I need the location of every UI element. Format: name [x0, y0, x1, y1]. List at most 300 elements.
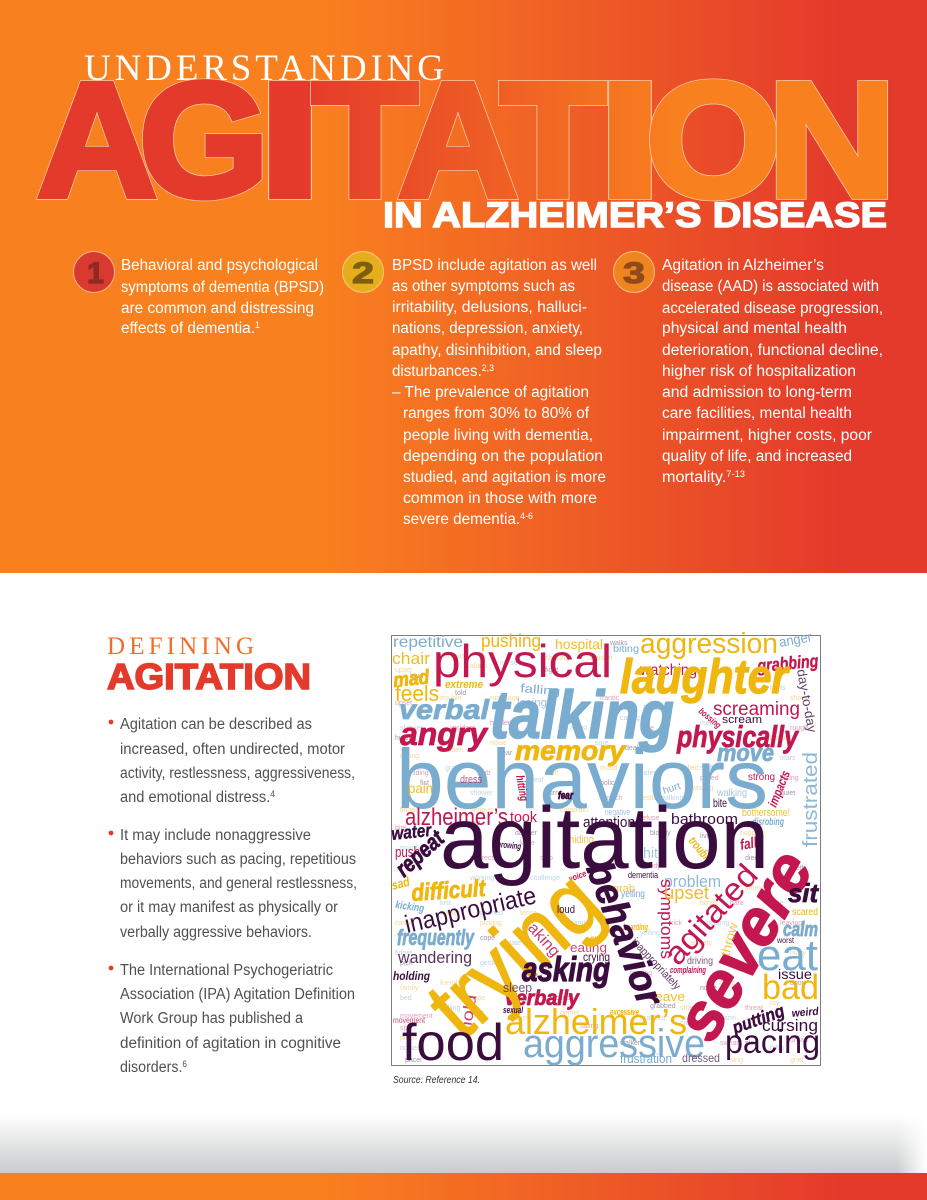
word cloud: dark purple words: repeat	[390, 824, 450, 882]
word cloud background: small words: nose	[450, 840, 465, 847]
word cloud: dark purple words: cursing	[762, 1016, 818, 1035]
word cloud: dark purple words: sit	[788, 878, 819, 908]
word cloud: crimson words: hitting	[513, 774, 531, 803]
word cloud background: small words: staff	[545, 770, 558, 777]
word cloud: crimson words: angry	[400, 716, 489, 752]
word cloud background: small words: upset	[395, 700, 412, 707]
word cloud background: small words: rude	[640, 725, 654, 732]
word cloud: blue words: hit	[643, 845, 659, 862]
word cloud background: small words: rage	[750, 960, 764, 967]
word cloud background: small words: dread	[790, 1037, 808, 1044]
text block: point 1: 1	[255, 320, 260, 330]
word cloud: dark purple words: fear	[558, 790, 574, 802]
word cloud: gold words: hospital	[555, 636, 603, 652]
text block: point 2: irritability, delusions, halluci-	[392, 299, 587, 316]
text block: bullet 1: 4	[270, 789, 275, 799]
word cloud: dark purple words: behavior	[578, 856, 671, 1013]
word cloud: gold words: bad	[762, 968, 819, 1007]
word cloud background: small words: fight	[545, 667, 558, 674]
text block: point 1: are common and distressing	[121, 300, 314, 317]
word cloud background: small words: hiding	[410, 770, 429, 777]
heading: defining agitation: AGITATION	[107, 656, 311, 697]
word cloud: gold words: alzheimer’s	[505, 1001, 687, 1042]
word cloud background: small words: lonely	[745, 885, 764, 892]
title: agitation: I	[598, 48, 662, 231]
word cloud: crimson words: agitated	[656, 857, 765, 972]
text block: point 2: 4-6	[520, 511, 533, 521]
title: agitation: A	[37, 48, 157, 231]
title: in alzheimer's disease: IN ALZHEIMER’S DISEASE	[383, 196, 887, 235]
word cloud background: small words: nervous	[440, 653, 465, 660]
word cloud: blue words: frustrated	[800, 752, 822, 847]
word cloud: dark purple words: issue	[778, 966, 812, 982]
word cloud background: small words: bored	[700, 900, 718, 907]
word cloud background: small words: calling	[620, 715, 640, 722]
word cloud background: small words: pulled	[700, 775, 719, 782]
word cloud: crimson words	[393, 635, 827, 1052]
word cloud background: small words: shower	[400, 725, 423, 732]
title: agitation: A	[398, 48, 518, 231]
text block: bullet 3: disorders.	[120, 1059, 188, 1076]
word cloud: blue words: frequently	[397, 925, 475, 950]
word cloud background: small words: night	[720, 980, 735, 987]
text block: point 3: deterioration, functional decline,	[662, 342, 883, 359]
word cloud background: small words: slap	[540, 855, 553, 862]
word cloud: dark purple words: sexual	[503, 1005, 523, 1015]
word cloud: dark purple words: worst	[776, 936, 795, 945]
word cloud: dark purple words: holding	[393, 969, 431, 983]
heading: defining agitation	[107, 633, 311, 697]
word cloud background: small words: threat	[745, 1005, 763, 1012]
word cloud background: small words: safety	[640, 770, 659, 777]
word cloud: crimson words: fall	[739, 834, 759, 854]
text block: point 3: care facilities, mental health	[662, 405, 852, 422]
word cloud: gold words: feels	[395, 681, 439, 706]
word cloud background: small words: twisting	[690, 785, 713, 792]
word cloud background: small words: agitate	[500, 940, 521, 947]
icon: number 3 badge: 3	[623, 257, 645, 290]
word cloud background: small words: quiet	[780, 790, 795, 797]
word cloud background: small words: nurse	[500, 660, 518, 667]
word cloud background: small words: strange	[680, 1005, 703, 1012]
word cloud background: small words: tone	[770, 900, 784, 907]
word cloud: gold words: hoarding	[623, 922, 648, 932]
word cloud background: small words: movement	[400, 1013, 433, 1020]
text block: bullet 2: verbally aggressive behaviors.	[120, 924, 312, 941]
word cloud background: small words: grabbed	[640, 1015, 666, 1022]
word cloud: blue words: repetitive	[393, 634, 463, 651]
text block: point 2: people living with dementia,	[403, 427, 593, 444]
text block: point 3	[662, 257, 883, 486]
word cloud: blue words: walking	[716, 788, 747, 799]
word cloud: blue words: frustration	[620, 1051, 672, 1066]
text block: bullet 3: definition of agitation in cognitive	[120, 1035, 341, 1052]
word cloud background: small words: caring	[395, 920, 414, 927]
word cloud background: small words: crazy	[680, 1020, 697, 1027]
word cloud: gold words: cut	[590, 934, 601, 945]
word cloud background: small words: grabs	[445, 765, 463, 772]
word cloud background: small words: tense	[520, 910, 537, 917]
word cloud: gold words: trouble	[686, 834, 716, 866]
word cloud background: small words: serious	[470, 807, 493, 814]
word cloud background: small words: bloody	[650, 830, 671, 837]
word cloud: dark purple words: bathroom	[671, 811, 738, 828]
word cloud: crimson words: push	[395, 844, 420, 861]
word cloud background: small words: sing	[730, 1057, 743, 1064]
word cloud background: small words: shower	[470, 790, 493, 797]
word cloud: blue words: problem	[664, 872, 721, 891]
title: agitation: T	[312, 48, 418, 231]
word cloud: dark purple words: driving	[687, 956, 713, 967]
word cloud background: small words: lived	[700, 833, 715, 840]
word cloud: gold words: pushing	[481, 631, 541, 651]
word cloud: dark purple words: crying	[583, 950, 610, 964]
icon: number 3 badge	[614, 252, 654, 292]
word cloud: blue words: move	[717, 740, 774, 767]
word cloud: crimson words: voice	[567, 868, 588, 884]
word cloud background: small words: resident	[450, 725, 475, 732]
word cloud background: small words: refuse	[640, 815, 660, 822]
word cloud: blue words: falling	[520, 681, 561, 698]
title: agitation: T	[312, 48, 418, 231]
text block: point 3: and admission to long-term	[662, 384, 852, 401]
word cloud background: small words: working	[469, 875, 494, 882]
text block: point 2: – The prevalence of agitation	[392, 384, 589, 401]
word cloud background: small words: leaving	[780, 920, 802, 927]
word cloud background: small words: finger	[400, 807, 418, 814]
word cloud: gold words: bothersome!	[742, 807, 790, 819]
word cloud: gold words: leave	[652, 989, 685, 1004]
word cloud: dark purple words: putting	[729, 1000, 787, 1038]
word cloud background: small words: yells	[470, 1010, 485, 1017]
title: agitation: T	[500, 48, 606, 231]
word cloud background: small words: walker	[619, 1040, 641, 1047]
word cloud: crimson words: bossing	[697, 706, 723, 730]
word cloud: dark purple words: dementia	[628, 870, 658, 880]
word cloud: gold words	[390, 628, 819, 1057]
word cloud background: small words: shaking	[545, 655, 569, 662]
word cloud background: small words: burn	[545, 790, 559, 797]
word cloud: crimson words: verbally	[505, 987, 580, 1010]
word cloud background: small words: tossing	[630, 970, 652, 977]
icon: number 2 badge: 2	[352, 257, 374, 290]
word cloud: gold words: excessive	[610, 1007, 639, 1017]
word cloud: blue words: eat	[757, 931, 818, 980]
word cloud: dark purple words: attention	[583, 814, 635, 831]
word cloud background: small words: kick	[670, 920, 683, 927]
text block: point 2: common in those with more	[403, 490, 597, 507]
word cloud: crimson words: dress	[460, 774, 482, 786]
word cloud background: small words: harm	[720, 1015, 736, 1022]
word cloud background: small words: shout	[790, 695, 807, 702]
panel: header background	[0, 0, 927, 573]
word cloud background: small words: spit	[400, 1025, 411, 1032]
word cloud background: small words: scared	[510, 1015, 531, 1022]
word cloud background: small words: mood	[600, 765, 618, 772]
word cloud background: small words: moody	[400, 845, 422, 852]
word cloud background: small words: stuff	[700, 765, 713, 772]
word cloud: crimson words: physical	[433, 635, 612, 687]
word cloud background: small words: picking	[480, 920, 502, 927]
word cloud: blue words: disrobing	[752, 817, 784, 828]
word cloud background: small words: picked	[550, 995, 570, 1002]
text block: point 3: disease (AAD) is associated with	[662, 278, 879, 295]
word cloud: gold words: hiding	[569, 834, 594, 846]
word cloud background: small words: drive	[620, 1010, 635, 1017]
word cloud background: small words: pulling	[440, 1005, 460, 1012]
word cloud: blue words: behaviors	[396, 732, 768, 826]
word cloud: dark purple words: sleep	[503, 980, 532, 995]
word cloud: dark purple words: wandering	[397, 948, 472, 967]
word cloud: dark purple words: pacing	[725, 1023, 820, 1060]
icon: number 2 badge	[342, 252, 384, 292]
title: agitation: A	[37, 48, 157, 231]
title: agitation: O	[646, 48, 781, 231]
word cloud background: small words: mean	[700, 720, 718, 727]
text block: bullet 2: It may include nonaggressive	[120, 827, 311, 844]
text block: bullet 3: Association (IPA) Agitation Definition	[120, 986, 355, 1003]
text block: point 2: nations, depression, anxiety,	[392, 320, 583, 337]
word cloud: gold words: grab	[613, 883, 635, 895]
word cloud background: small words: tears	[780, 755, 796, 762]
word cloud background: small words: stop	[745, 1040, 758, 1047]
text block: bullet 1: and emotional distress.	[120, 789, 279, 806]
word cloud background: small words: sore	[595, 740, 609, 747]
heading: defining agitation: DEFINING	[107, 633, 254, 660]
word cloud: dark purple words	[390, 668, 820, 1072]
text block: bullet 3	[109, 962, 355, 1076]
word cloud: blue words: yelling	[621, 889, 645, 900]
word cloud background: small words: upset	[395, 667, 412, 674]
word cloud background: small words: danger	[515, 830, 537, 837]
title: agitation: N	[768, 48, 896, 231]
word cloud: gold words: scared	[792, 907, 818, 918]
text block: bullet 1: activity, restlessness, aggressiveness,	[120, 765, 355, 782]
title: agitation: A	[398, 48, 518, 231]
text block: point 1	[121, 257, 324, 337]
word cloud: dark purple words: agitation	[440, 790, 769, 887]
text block: point 2: depending on the population	[403, 448, 603, 465]
text block: point 2: 2,3	[482, 363, 494, 373]
word cloud: crimson words: impacts	[765, 768, 793, 809]
text block: point 3: physical and mental health	[662, 320, 847, 337]
word cloud: blue words: talking	[490, 677, 674, 753]
word cloud background: small words: walks	[609, 640, 628, 647]
word cloud background: small words: frantic	[600, 695, 620, 702]
text block: point 1: effects of dementia.	[121, 320, 256, 337]
text block: point 3: mortality.	[662, 469, 724, 486]
caption: source: Source: Reference 14.	[393, 1075, 480, 1086]
word cloud background: small words: danger	[570, 920, 592, 927]
word cloud background: small words: walking	[659, 795, 683, 802]
word cloud: gold words: extreme	[445, 679, 483, 691]
word cloud: crimson words: alzheimer’s	[405, 804, 508, 831]
text block: bullet 1	[109, 716, 355, 806]
word cloud background: small words: rub	[480, 770, 490, 777]
text block: point 3: 7-13	[726, 469, 745, 479]
word cloud background: small words: redirect	[470, 855, 493, 862]
word cloud background: small words: complain	[560, 807, 588, 814]
text block: point 1: Behavioral and psychological	[121, 257, 318, 274]
word cloud background: small words: crying	[780, 775, 799, 782]
word cloud: dark purple words: dressed	[682, 1051, 720, 1065]
word cloud background: small words: walker	[439, 910, 461, 917]
text block: point 2: apathy, disinhibition, and sleep	[392, 342, 602, 359]
word cloud: blue words: calm	[783, 919, 818, 941]
word cloud background: small words: trouble	[440, 695, 462, 702]
word cloud background: small words	[395, 640, 808, 1064]
footer bar	[0, 1173, 927, 1200]
word cloud background: small words: talks	[770, 1045, 785, 1052]
word cloud background: small words: pulled	[680, 765, 699, 772]
word cloud background: small words: loud	[410, 673, 423, 680]
word cloud background: small words: pushed	[480, 910, 503, 917]
word cloud: gold words: trying	[408, 852, 620, 1057]
word cloud: gold words: laughter	[620, 651, 790, 704]
word cloud background: small words: brain	[465, 820, 481, 827]
word cloud background: small words: fist	[420, 780, 429, 787]
word cloud: gold words: throw	[717, 920, 741, 958]
word cloud background: small words: pacer	[405, 1057, 423, 1064]
word cloud background: small words: died	[745, 855, 758, 862]
word cloud background: small words: dealing	[625, 745, 648, 752]
word cloud background: small words: scratch	[600, 795, 623, 802]
word cloud: crimson words: severe	[660, 837, 827, 1052]
title: agitation: O	[646, 48, 781, 231]
word cloud: dark purple words: water	[390, 820, 433, 844]
text block: point 2: as other symptoms such as	[392, 278, 575, 295]
title: agitation: G	[139, 48, 269, 231]
word cloud: blue words: hurt	[662, 781, 682, 797]
text block: point 3: Agitation in Alzheimer’s	[662, 257, 824, 274]
chart: word cloud	[390, 628, 827, 1072]
word cloud background: small words: grabbed	[650, 1003, 676, 1010]
word cloud: gold words: aggression	[640, 628, 778, 660]
word cloud: crimson words: strong	[748, 772, 775, 783]
word cloud: blue words: negative	[605, 807, 630, 817]
title: agitation	[37, 48, 896, 231]
word cloud background: small words: harder	[490, 720, 511, 727]
word cloud background: small words: falling	[580, 1023, 598, 1030]
word cloud: crimson words: eating	[570, 940, 607, 955]
title: understanding: UNDERSTANDING	[84, 48, 444, 89]
word cloud: blue words: anger	[778, 628, 813, 650]
word cloud: crimson words: complaining	[670, 965, 706, 975]
word cloud background: small words: family	[400, 985, 419, 992]
word cloud background: small words: noise	[490, 740, 507, 747]
icon: number 1 badge: 1	[87, 257, 104, 290]
word cloud background: small words: cope	[470, 995, 485, 1002]
word cloud background: small words: swear	[720, 1040, 739, 1047]
word cloud: dark purple words: inappropriate	[402, 881, 539, 939]
word cloud: blue words: aggressive	[523, 1022, 705, 1066]
word cloud: dark purple words: day-to-day	[794, 668, 820, 734]
word cloud background: small words: alarm	[470, 663, 488, 670]
title: agitation: N	[768, 48, 896, 231]
title: agitation: G	[139, 48, 269, 231]
word cloud: dark purple words: inappropriately	[629, 936, 683, 993]
word cloud background: small words: wander	[589, 655, 614, 662]
word cloud background: small words: hurting	[395, 735, 417, 742]
text block: bullet 3: Work Group has published a	[120, 1010, 303, 1027]
text block: point 2: disturbances.	[392, 363, 484, 380]
word cloud background: small words: teeth	[790, 865, 806, 872]
text block: point 1: symptoms of dementia (BPSD)	[121, 279, 324, 296]
word cloud: crimson words: watching	[639, 662, 697, 679]
word cloud background: small words: hopping	[740, 830, 765, 837]
word cloud: dark purple words: loud	[557, 904, 575, 916]
word cloud background: small words: rummage	[490, 695, 520, 702]
word cloud: blue words: anxious	[643, 702, 670, 712]
word cloud background: small words: cope	[480, 935, 495, 942]
word cloud background: small words: gesture	[480, 960, 503, 967]
word cloud: crimson words: took	[510, 809, 537, 826]
text block: point 2: severe dementia.	[403, 511, 522, 528]
word cloud background: small words: door	[790, 980, 805, 987]
text block: point 3: higher risk of hospitalization	[662, 363, 856, 380]
text block: bullet 3: The International Psychogeriatric	[120, 962, 333, 979]
word cloud background: small words: friends	[440, 980, 462, 987]
word cloud background: small words: cry	[770, 1000, 780, 1007]
word cloud background: small words: hurry	[790, 950, 806, 957]
word cloud: blue words	[393, 628, 822, 1066]
text block: bullet 1: Agitation can be described as	[120, 716, 312, 733]
text block: point 2	[392, 257, 606, 528]
word cloud background: small words: dinner	[560, 1010, 580, 1017]
word cloud: dark purple words: asking	[522, 951, 610, 989]
word cloud: gold words: difficult	[411, 875, 487, 907]
word cloud background: small words: hitting	[560, 717, 579, 724]
word cloud background: small words: deaf	[530, 777, 544, 784]
word cloud: crimson words: screaming	[713, 699, 800, 720]
word cloud background: small words: bloody	[640, 863, 661, 870]
text block: bullet 2: behaviors such as pacing, repetitious	[120, 851, 356, 868]
text block: bullet 2	[109, 827, 357, 941]
word cloud background: small words: pick	[400, 960, 413, 967]
word cloud background: small words: knife	[520, 840, 535, 847]
word cloud: gold words: memory	[515, 735, 626, 766]
title: agitation: I	[258, 48, 322, 231]
word cloud: gold words: sad	[390, 874, 412, 893]
word cloud background: small words: sudden	[440, 747, 463, 754]
word cloud background: small words: repeating	[700, 920, 729, 927]
word cloud background: small words: bother	[770, 735, 791, 742]
word cloud background: small words: restless	[640, 795, 665, 802]
word cloud background: small words: lost	[440, 900, 451, 907]
word cloud: crimson words: taking	[521, 916, 563, 960]
title: agitation: I	[258, 48, 322, 231]
word cloud background: small words: noise	[700, 985, 717, 992]
word cloud background: small words: rough	[790, 725, 808, 732]
word cloud background: small words: noises	[400, 1045, 421, 1052]
word cloud background: small words: hate	[730, 900, 744, 907]
text block: point 2: ranges from 30% to 80% of	[403, 405, 590, 422]
word cloud: blue words: biting	[613, 644, 639, 655]
word cloud background: small words: pinch	[400, 1035, 417, 1042]
word cloud: dark purple words: weird	[791, 1006, 819, 1020]
word cloud background: small words: challenge	[530, 875, 560, 882]
word cloud: blue words: losing	[517, 697, 547, 709]
text block: point 2: studied, and agitation is more	[403, 469, 606, 486]
word cloud: blue words: verbal	[399, 694, 490, 725]
word cloud background: small words: caring	[400, 753, 419, 760]
word cloud: crimson words: physically	[676, 719, 799, 754]
word cloud background: small words: anxiety	[690, 940, 713, 947]
word cloud background: small words: police	[600, 780, 618, 787]
word cloud: gold words: upset	[664, 883, 709, 903]
footer shadow	[0, 1115, 927, 1173]
word cloud: gold words: mad	[392, 666, 431, 692]
